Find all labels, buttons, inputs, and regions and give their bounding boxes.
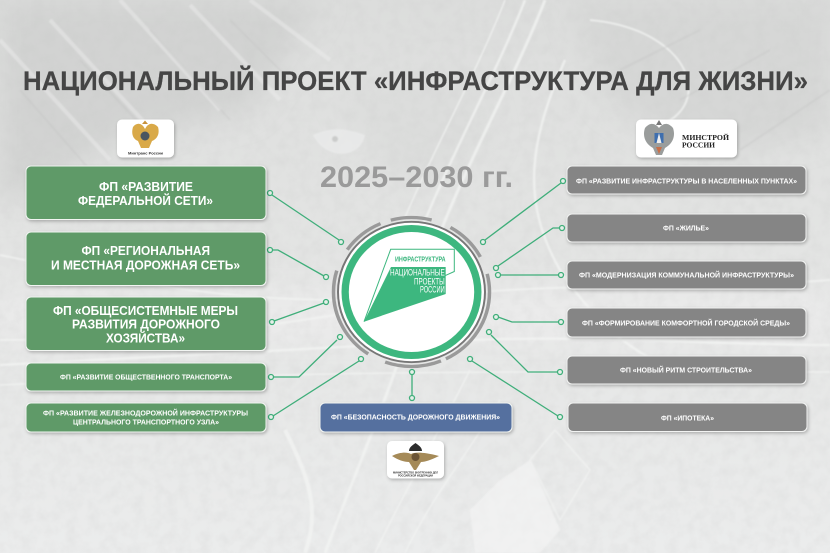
panel: ФП Развитие железнодорожной инфраструктуры xyxy=(26,403,266,432)
panel: ФП Развитие общественного транспорта xyxy=(26,363,266,391)
Minstroy wordmark xyxy=(682,133,729,150)
panel: ФП Ипотека xyxy=(568,403,807,432)
panel: ФП Модернизация коммунальной инфраструктуры xyxy=(567,261,806,289)
panel: ФП Региональная и местная дорожная сеть xyxy=(26,232,266,286)
panel: ФП Новый ритм строительства xyxy=(567,356,806,384)
national project logo: НАЦИОНАЛЬНЫЕ xyxy=(390,268,445,278)
icon: Mintrans gold eagle emblem xyxy=(132,120,159,148)
panel: ФП Развитие железнодорожной инфраструктуры: ФП «РАЗВИТИЕ ЖЕЛЕЗНОДОРОЖНОЙ ИНФРАСТРУКТУРЫ xyxy=(43,408,248,418)
icon: Minstroy grey eagle emblem xyxy=(644,120,674,155)
panel: ФП Развитие инфраструктуры в населенных пунктах xyxy=(567,166,806,194)
national project logo: ИНФРАСТРУКТУРА xyxy=(395,256,446,263)
MVD caption: РОССИЙСКОЙ ФЕДЕРАЦИИ xyxy=(398,474,433,478)
panel: ФП Региональная и местная дорожная сеть: ФП «РЕГИОНАЛЬНАЯ xyxy=(82,243,210,258)
icon: MVD double-headed eagle emblem xyxy=(392,443,439,470)
panel: ФП Развитие инфраструктуры в населенных пунктах: ФП «РАЗВИТИЕ ИНФРАСТРУКТУРЫ В НАСЕЛЕННЫХ ПУНКТАХ» xyxy=(576,178,797,186)
Minstroy wordmark: РОССИИ xyxy=(682,140,715,150)
panel: ФП Жилье xyxy=(567,214,806,242)
national project logo: ПРОЕКТЫ xyxy=(414,276,445,288)
panel: ФП Безопасность дорожного движения: ФП «БЕЗОПАСНОСТЬ ДОРОЖНОГО ДВИЖЕНИЯ» xyxy=(331,414,500,422)
panel: ФП Безопасность дорожного движения xyxy=(320,403,512,432)
panel: ФП Развитие федеральной сети: ФЕДЕРАЛЬНОЙ СЕТИ» xyxy=(78,193,213,208)
panel: ФП Развитие железнодорожной инфраструктуры: ЦЕНТРАЛЬНОГО ТРАНСПОРТНОГО УЗЛА» xyxy=(73,420,219,426)
panel: ФП Общесистемные меры xyxy=(26,297,266,350)
Minstroy wordmark: МИНСТРОЙ xyxy=(682,133,729,142)
panel: ФП Региональная и местная дорожная сеть: И МЕСТНАЯ ДОРОЖНАЯ СЕТЬ» xyxy=(51,258,240,272)
central emblem xyxy=(334,218,490,366)
panel: ФП Формирование комфортной городской среды xyxy=(567,308,806,337)
connectors with ring dots xyxy=(268,178,566,420)
Mintrans caption: Минтранс России xyxy=(128,152,164,156)
MVD caption: МИНИСТЕРСТВО ВНУТРЕННИХ ДЕЛ xyxy=(393,472,438,474)
panel: ФП Общесистемные меры: РАЗВИТИЯ ДОРОЖНОГО xyxy=(72,316,220,332)
green and white disc xyxy=(342,225,482,359)
MVD caption xyxy=(393,472,438,478)
national project logo: РОССИИ xyxy=(420,284,445,296)
panel: ФП Общесистемные меры: ХОЗЯЙСТВА» xyxy=(106,330,185,346)
national project logo xyxy=(364,249,454,322)
panel: ФП Развитие общественного транспорта: ФП «РАЗВИТИЕ ОБЩЕСТВЕННОГО ТРАНСПОРТА» xyxy=(60,374,232,382)
title: НАЦИОНАЛЬНЫЙ ПРОЕКТ «ИНФРАСТРУКТУРА ДЛЯ ЖИЗНИ» xyxy=(23,65,808,96)
period label: 2025–2030 гг. xyxy=(320,161,513,194)
logo: Минстрой России xyxy=(636,120,737,158)
grey segmented ring xyxy=(334,218,490,366)
panel: ФП Ипотека: ФП «ИПОТЕКА» xyxy=(661,416,714,422)
panel: ФП Новый ритм строительства: ФП «НОВЫЙ РИТМ СТРОИТЕЛЬСТВА» xyxy=(620,366,752,374)
panel: ФП Развитие федеральной сети: ФП «РАЗВИТИЕ xyxy=(99,179,193,194)
panel: ФП Модернизация коммунальной инфраструктуры: ФП «МОДЕРНИЗАЦИЯ КОММУНАЛЬНОЙ ИНФРАСТРУКТУРЫ» xyxy=(579,270,794,280)
logo: Минтранс России xyxy=(117,120,174,158)
panel: ФП Общесистемные меры: ФП «ОБЩЕСИСТЕМНЫЕ МЕРЫ xyxy=(53,303,238,318)
panel: ФП Жилье: ФП «ЖИЛЬЕ» xyxy=(663,226,709,232)
panel: ФП Формирование комфортной городской среды: ФП «ФОРМИРОВАНИЕ КОМФОРТНОЙ ГОРОДСКОЙ СРЕДЫ» xyxy=(582,318,790,328)
panel: ФП Развитие федеральной сети xyxy=(26,166,266,220)
logo: МВД России xyxy=(387,441,444,478)
